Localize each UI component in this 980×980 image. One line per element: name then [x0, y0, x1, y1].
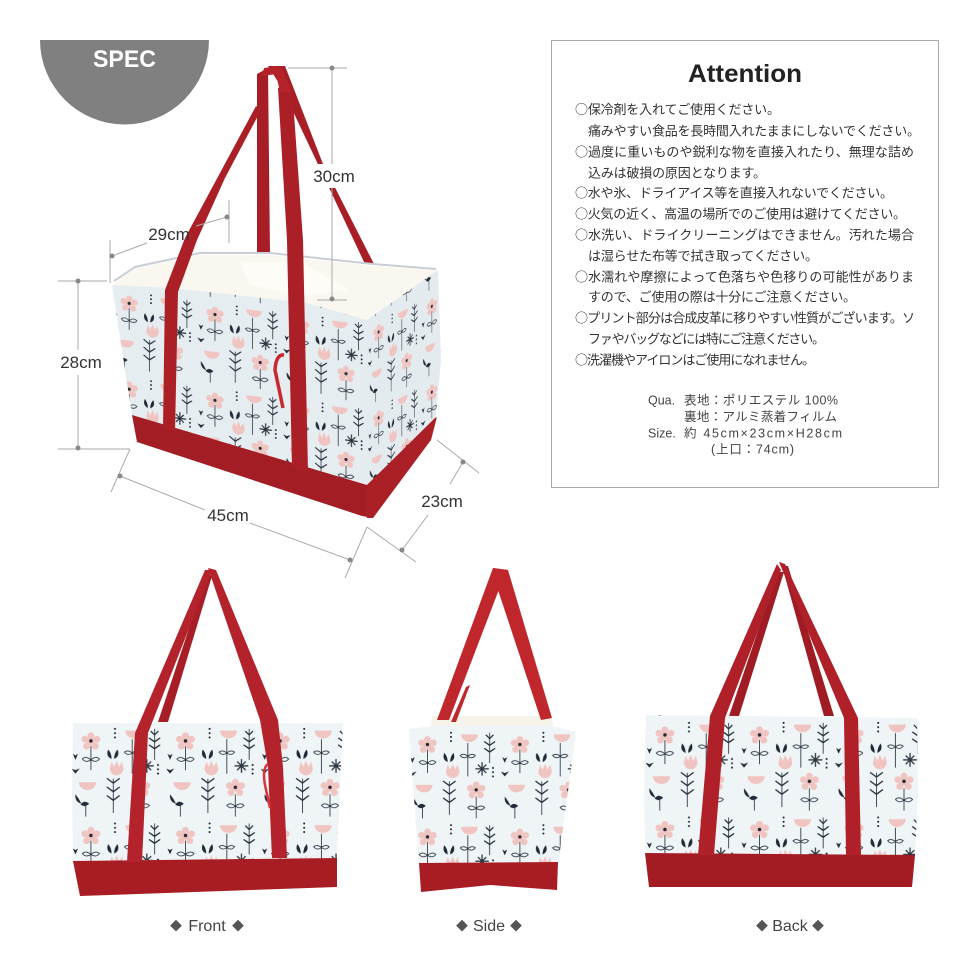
top loop	[262, 66, 292, 92]
dimension: height 28cm	[58, 278, 130, 450]
care instructions: 痛みやすい食品を長時間入れたままにしないでください。	[588, 120, 920, 140]
straps	[127, 568, 287, 862]
caption: Back: ◆	[812, 917, 824, 934]
care instructions: ○プリント部分は合成皮革に移りやすい性質がございます。ソ	[575, 308, 915, 326]
caption: Back: Back	[772, 918, 809, 935]
front straps	[163, 86, 308, 472]
care instructions: ○洗濯機やアイロンはご使用になれません。	[575, 350, 815, 368]
bag body print	[409, 726, 576, 866]
pull tab	[275, 355, 284, 408]
caption: Side: Side	[473, 918, 505, 935]
care instructions: ファやバッグなどには特にご注意ください。	[588, 328, 825, 348]
caption: Front	[170, 917, 244, 935]
dimension: width 45cm: 45cm	[207, 506, 249, 525]
material and size: 表地：ポリエステル 100%	[684, 394, 838, 408]
rear straps	[257, 66, 374, 264]
base	[132, 415, 436, 518]
dimension: depth 23cm: 23cm	[421, 492, 463, 511]
dimension: height 30cm	[288, 66, 357, 302]
care instructions	[575, 99, 920, 368]
caption: Front: ◆	[170, 917, 182, 934]
care instructions: ○水濡れや摩擦によって色落ちや色移りの可能性がありま	[575, 266, 914, 286]
caption: Side	[456, 917, 522, 935]
care instructions: ○保冷剤を入れてご使用ください。	[575, 99, 780, 118]
front view bag	[72, 568, 343, 896]
care instructions: は湿らせた布等で拭き取ってください。	[588, 246, 818, 264]
material and size: Size.	[648, 426, 676, 440]
pull tab	[264, 764, 270, 808]
bag body print	[644, 715, 918, 856]
material and size: (上口：74cm)	[711, 442, 794, 456]
straps	[698, 562, 861, 855]
attention heading: Attention	[688, 60, 802, 88]
caption: Side: ◆	[456, 917, 468, 934]
material and size	[648, 394, 842, 456]
dimension: width 29cm: 29cm	[148, 225, 190, 244]
rear straps	[729, 566, 834, 716]
care instructions: ○火気の近く、高温の場所でのご使用は避けてください。	[575, 204, 906, 222]
base	[645, 853, 915, 887]
caption: Front: ◆	[232, 917, 244, 934]
front face print	[112, 285, 367, 485]
care instructions: ○水洗い、ドライクリーニングはできません。汚れた場合	[575, 224, 914, 244]
side face print	[367, 270, 441, 485]
back view bag	[644, 562, 918, 887]
care instructions: ○水や氷、ドライアイス等を直接入れないでください。	[575, 182, 893, 202]
base	[419, 862, 558, 892]
bag interior	[112, 255, 438, 320]
care instructions: 込みは破損の原因となります。	[588, 162, 766, 182]
material and size: Qua.	[648, 394, 675, 408]
rim print	[114, 253, 436, 281]
dimension: width 29cm	[110, 200, 230, 283]
caption: Back: ◆	[756, 917, 768, 934]
care instructions: ○過度に重いものや鋭利な物を直接入れたり、無理な詰め	[575, 142, 914, 160]
dimension: height 30cm: 30cm	[313, 167, 355, 186]
SPEC heading: SPEC	[93, 46, 156, 73]
panel: attention notes	[552, 40, 938, 488]
bag body print	[72, 723, 343, 861]
main bag photo	[112, 66, 441, 518]
caption: Front: Front	[188, 918, 226, 935]
caption: Back	[756, 917, 824, 935]
dimension: width 45cm	[111, 449, 367, 578]
straps	[437, 568, 552, 722]
dimension: height 28cm: 28cm	[60, 353, 102, 372]
dimension: depth 23cm	[367, 440, 479, 562]
side view bag	[409, 568, 576, 892]
material and size: 約 45cm×23cm×H28cm	[684, 426, 842, 440]
material and size: 裏地：アルミ蒸着フィルム	[684, 409, 837, 424]
base	[73, 858, 337, 896]
care instructions: すので、ご使用の際は十分にご注意ください。	[588, 286, 856, 306]
top lining	[430, 716, 554, 734]
SPEC badge	[40, 40, 209, 124]
rear strap	[158, 574, 212, 722]
caption: Side: ◆	[510, 917, 522, 934]
